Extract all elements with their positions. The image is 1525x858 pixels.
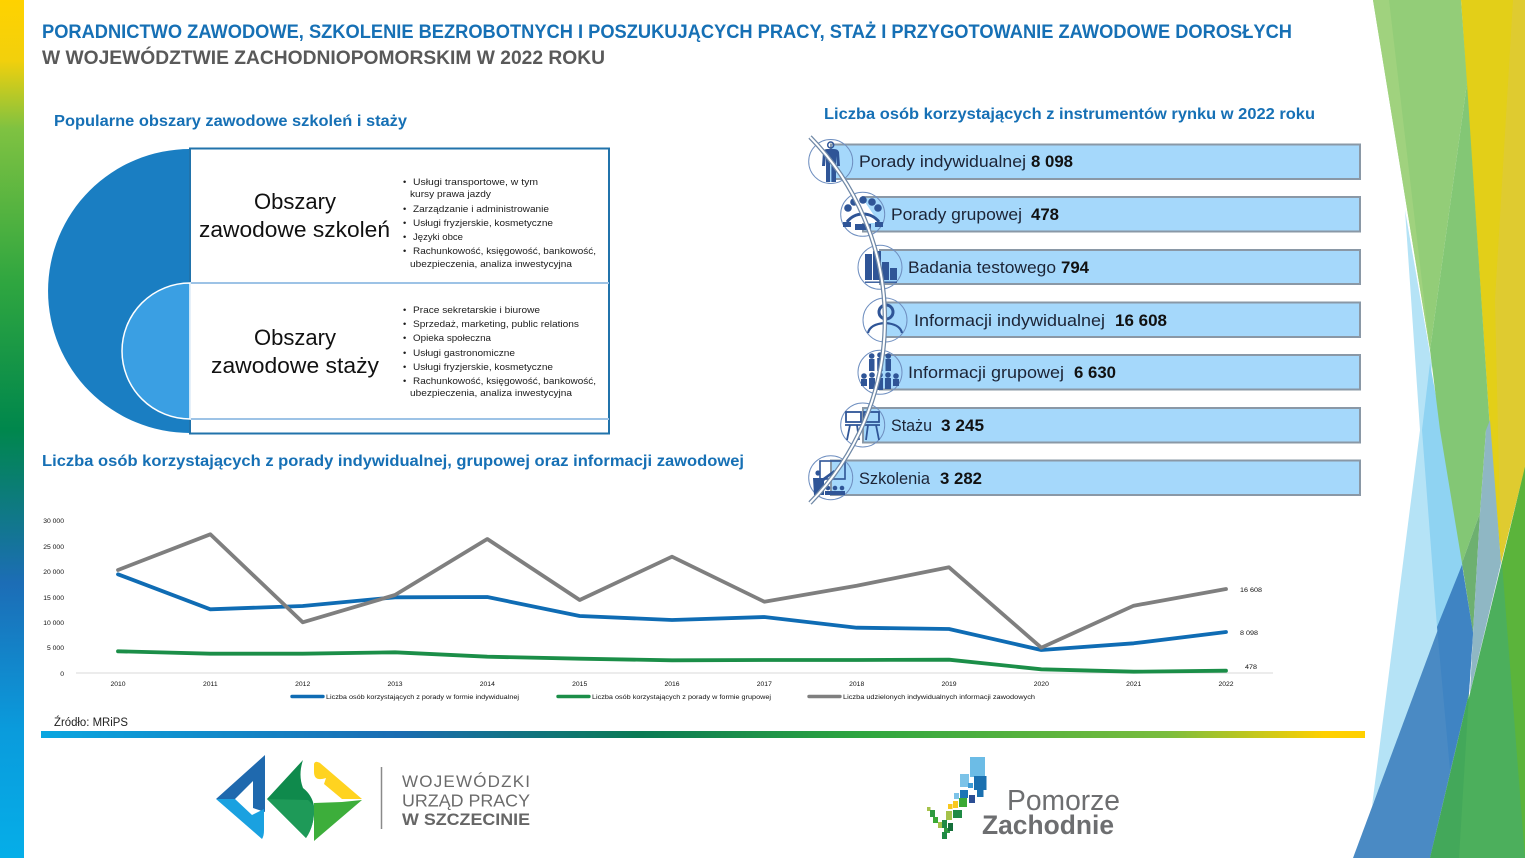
- right decorative facets: [1353, 0, 1525, 858]
- connecting arc: [810, 137, 885, 503]
- y axis labels: 20 000: [43, 569, 64, 576]
- training list: Usługi transportowe, w tym: [413, 177, 538, 187]
- training list: kursy prawa jazdy: [410, 189, 491, 199]
- outer box: [190, 148, 609, 434]
- row: individual advice: 8 098: [1031, 153, 1073, 171]
- y axis labels: 0: [60, 671, 64, 678]
- title: W WOJEWÓDZTWIE ZACHODNIOPOMORSKIM W 2022 ROKU: [42, 45, 605, 69]
- row: group information: [858, 350, 1116, 394]
- x axis labels: 2018: [849, 681, 864, 688]
- logo: Pomorze Zachodnie: Pomorze: [1007, 785, 1120, 817]
- row: individual advice: Porady indywidualnej: [859, 153, 1026, 171]
- series: vocational information: [118, 534, 1226, 648]
- internship list: •: [403, 319, 406, 329]
- row: internship: 3 245: [941, 417, 984, 435]
- x axis labels: 2013: [387, 681, 403, 688]
- panel: areas diagram: [48, 148, 609, 434]
- internship list: •: [403, 305, 406, 315]
- training list: •: [403, 246, 406, 256]
- y axis labels: 15 000: [43, 595, 64, 602]
- internship list: [403, 305, 596, 398]
- row: internship: Stażu: [891, 417, 932, 435]
- row: tests: [858, 245, 1090, 289]
- y axis labels: 10 000: [43, 620, 64, 627]
- end labels: [1240, 587, 1262, 671]
- internship heading: zawodowe staży: [211, 353, 379, 378]
- heading: popular areas: Popularne obszary zawodowe szkoleń i staży: [54, 113, 407, 130]
- x axis labels: 2010: [110, 681, 126, 688]
- row: tests: 794: [1061, 259, 1090, 277]
- end labels: 8 098: [1240, 630, 1258, 637]
- training heading: zawodowe szkoleń: [199, 217, 390, 242]
- internship list: Sprzedaż, marketing, public relations: [413, 319, 579, 329]
- line chart: [43, 518, 1273, 701]
- row: training: [809, 456, 982, 500]
- heading: market instruments: Liczba osób korzystających z instrumentów rynku w 2022 roku: [824, 106, 1315, 123]
- training list: Zarządzanie i administrowanie: [413, 204, 549, 214]
- internship list: •: [403, 362, 406, 372]
- logo: Wojewódzki Urząd Pracy: [216, 755, 530, 841]
- heading: line chart: Liczba osób korzystających z porady indywidualnej, grupowej oraz informacji zawodowej: [42, 453, 744, 470]
- internship list: •: [403, 333, 406, 343]
- left gradient stripe: [0, 0, 24, 858]
- horizontal gradient bar: [41, 731, 1365, 738]
- internship list: Opieka społeczna: [413, 333, 492, 343]
- training heading: [199, 189, 390, 242]
- row: training: Szkolenia: [859, 470, 931, 488]
- panel: instruments list: [809, 137, 1360, 503]
- training heading: Obszary: [254, 189, 336, 214]
- series: group advice: [118, 651, 1226, 672]
- x axis labels: 2020: [1034, 681, 1049, 688]
- logo mark: [927, 757, 986, 839]
- title: PORADNICTWO ZAWODOWE, SZKOLENIE BEZROBOTNYCH I POSZUKUJĄCYCH PRACY, STAŻ I PRZYGOTOWANIE ZAWODOWE DOROSŁYCH: [42, 20, 1292, 43]
- row: group information: Informacji grupowej: [908, 364, 1064, 382]
- row: training: 3 282: [940, 470, 982, 488]
- logo: Wojewódzki Urząd Pracy: WOJEWÓDZKI: [402, 772, 530, 791]
- training list: [403, 177, 596, 269]
- row: individual advice: [809, 140, 1073, 184]
- training list: Języki obce: [413, 232, 463, 242]
- internship heading: [211, 325, 379, 378]
- small half circle: [122, 283, 190, 419]
- legend: Liczba osób korzystających z porady w formie grupowej: [592, 694, 772, 701]
- x axis labels: 2012: [295, 681, 310, 688]
- source note: Źródło: MRiPS: [54, 716, 128, 729]
- x axis labels: 2015: [572, 681, 587, 688]
- training list: Usługi fryzjerskie, kosmetyczne: [413, 218, 553, 228]
- row: group advice: [841, 192, 1059, 236]
- training list: ubezpieczenia, analiza inwestycyjna: [410, 259, 573, 269]
- end labels: 478: [1245, 664, 1257, 671]
- x axis labels: 2019: [941, 681, 957, 688]
- logo: Pomorze Zachodnie: [927, 757, 1120, 840]
- row: internship: [841, 403, 984, 447]
- internship list: Usługi fryzjerskie, kosmetyczne: [413, 362, 553, 372]
- legend: [292, 694, 1035, 701]
- internship list: Prace sekretarskie i biurowe: [413, 305, 540, 315]
- x axis labels: 2016: [664, 681, 680, 688]
- y axis labels: 5 000: [47, 645, 64, 652]
- training list: •: [403, 218, 406, 228]
- logo: Wojewódzki Urząd Pracy: W SZCZECINIE: [402, 810, 530, 829]
- x axis labels: 2022: [1218, 681, 1234, 688]
- internship list: •: [403, 348, 406, 358]
- row: tests: Badania testowego: [908, 259, 1056, 277]
- row: group advice: 478: [1031, 206, 1059, 224]
- internship heading: Obszary: [254, 325, 336, 350]
- y axis labels: 30 000: [43, 518, 64, 525]
- large half circle: [48, 149, 190, 433]
- row: individual information: Informacji indywidualnej: [914, 312, 1105, 330]
- logo mark: [216, 755, 362, 841]
- training list: •: [403, 232, 406, 242]
- training list: •: [403, 177, 406, 187]
- legend: Liczba osób korzystających z porady w formie indywidualnej: [326, 694, 520, 701]
- x axis labels: [110, 681, 1234, 688]
- logo: Wojewódzki Urząd Pracy: URZĄD PRACY: [402, 790, 530, 810]
- row: group advice: Porady grupowej: [891, 206, 1022, 224]
- legend: Liczba udzielonych indywidualnych informacji zawodowych: [843, 694, 1035, 701]
- x axis labels: 2014: [480, 681, 495, 688]
- y axis labels: [43, 518, 64, 678]
- row: group information: 6 630: [1074, 364, 1116, 382]
- x axis labels: 2021: [1126, 681, 1141, 688]
- end labels: 16 608: [1240, 587, 1262, 594]
- row: individual information: 16 608: [1115, 312, 1167, 330]
- title: [42, 20, 1292, 69]
- internship list: •: [403, 376, 406, 386]
- series: individual advice: [118, 574, 1226, 650]
- internship list: Usługi gastronomiczne: [413, 348, 515, 358]
- logo: Pomorze Zachodnie: Zachodnie: [982, 810, 1114, 840]
- training list: •: [403, 204, 406, 214]
- row: individual information: [863, 298, 1167, 342]
- bar backgrounds: [831, 144, 1360, 495]
- internship list: Rachunkowość, księgowość, bankowość,: [413, 376, 596, 386]
- internship list: ubezpieczenia, analiza inwestycyjna: [410, 388, 573, 398]
- x axis labels: 2011: [203, 681, 218, 688]
- training list: Rachunkowość, księgowość, bankowość,: [413, 246, 596, 256]
- y axis labels: 25 000: [43, 544, 64, 551]
- x axis labels: 2017: [757, 681, 772, 688]
